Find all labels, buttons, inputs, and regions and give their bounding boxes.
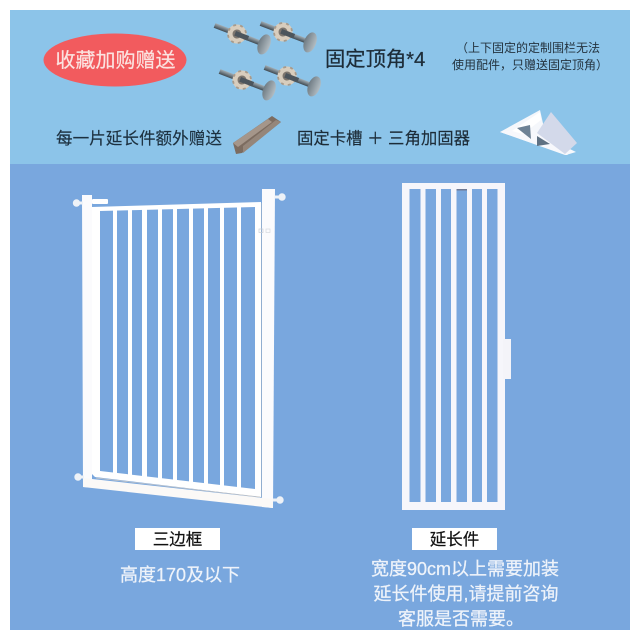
text: note on custom fences: （上下固定的定制围栏无法 (456, 40, 600, 55)
icon: four fixing screws (211, 14, 323, 102)
panel: accessories header (10, 10, 630, 164)
illustration: gate with three-sided frame (73, 189, 286, 508)
text: extension piece advice (371, 559, 559, 629)
text: extension piece advice: 延长件使用,请提前咨询 (374, 584, 558, 604)
text: height 170 and below: 高度170及以下 (120, 565, 240, 585)
side connector tab (503, 339, 511, 379)
text: note on custom fences: 使用配件，只赠送固定顶角） (452, 57, 608, 72)
right post (262, 189, 275, 508)
illustration: extension piece (402, 183, 511, 510)
label: three-sided frame (135, 528, 220, 550)
text: fixing corners x4: 固定顶角*4 (325, 48, 425, 71)
text: extension piece advice: 宽度90cm以上需要加装 (371, 559, 559, 579)
fixing knobs (73, 193, 286, 504)
text: fixing slot plus triangle reinforcer: 固定卡槽 ＋ 三角加固器 (297, 130, 470, 148)
lock detail (259, 229, 263, 232)
gate frame (92, 202, 261, 497)
icon: triangle reinforcer (500, 110, 577, 155)
left post (82, 195, 100, 488)
label: extension piece: 延长件 (430, 530, 479, 549)
text: note on custom fences (452, 40, 608, 72)
label: extension piece (412, 528, 497, 550)
text: extension gift note: 每一片延长件额外赠送 (56, 129, 222, 148)
badge: collect and add to cart gift: 收藏加购赠送 (56, 49, 176, 72)
panel: gate products (10, 164, 630, 630)
bottom frame rail (83, 478, 273, 508)
icon: metal fixing channel (233, 116, 281, 154)
badge: collect and add to cart gift (44, 34, 186, 86)
gate bars (113, 206, 241, 488)
text: extension piece advice: 客服是否需要。 (398, 609, 524, 629)
label: three-sided frame: 三边框 (153, 530, 202, 549)
top latch (92, 199, 108, 204)
